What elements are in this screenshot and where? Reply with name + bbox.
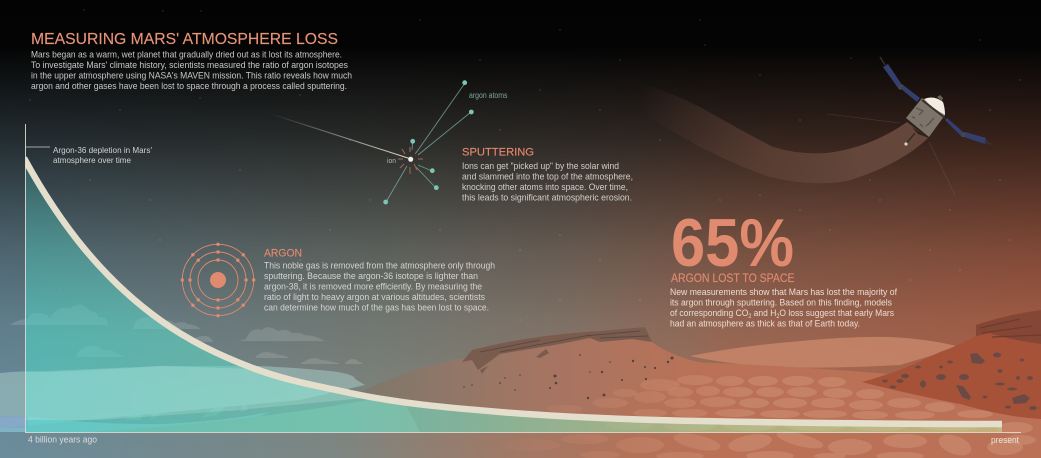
chart axes (26, 124, 1021, 432)
pale ice band inside chart area (25, 366, 365, 420)
cracked ground plates (460, 375, 1036, 458)
argon text: ratio of light to heavy argon at various altitudes, scientists (264, 291, 485, 302)
65% statistic: 65% (671, 205, 794, 281)
ion label: ion (387, 156, 396, 165)
x axis end label: present (991, 435, 1019, 445)
65% explanatory text: New measurements show that Mars has lost the majority of (670, 286, 897, 297)
argon text: argon-38, it is removed more efficiently. By measuring the (264, 280, 482, 292)
curve label: Argon-36 depletion in Mars' (53, 145, 152, 155)
sputtering diagram (268, 80, 474, 204)
sputtering text: knocking other atoms into space. Over time, (462, 181, 628, 192)
right hill (862, 310, 1041, 419)
65% explanatory text: had an atmosphere as thick as that of Earth today. (670, 318, 860, 328)
65% explanatory text: O loss suggest that early Mars (779, 307, 894, 318)
orbit swoosh (640, 83, 928, 183)
argon text: This noble gas is removed from the atmosphere only through (264, 260, 495, 270)
argon text (264, 260, 495, 312)
intro text: To investigate Mars' climate history, scientists measured the ratio of argon isotopes (31, 59, 348, 70)
curve label (25, 145, 152, 165)
icon: argon atom (181, 243, 255, 317)
65% explanatory text: 2 (776, 314, 780, 320)
foreground slope (90, 394, 420, 432)
argon depletion curve (24, 158, 1002, 424)
intro text (31, 48, 352, 91)
argon atoms label: argon atoms (469, 91, 508, 100)
central mesa (360, 327, 716, 418)
clouds (10, 305, 363, 364)
65% explanatory text: 2 (748, 314, 752, 320)
MAVEN spacecraft (827, 57, 994, 195)
intro text: in the upper atmosphere using NASA's MAVEN mission. This ratio reveals how much (31, 70, 352, 80)
argon text: sputtering. Because the argon-36 isotope is lighter than (264, 270, 478, 281)
sputtering text: Ions can get "picked up" by the solar wind (462, 160, 619, 171)
ground (0, 362, 1041, 458)
65% explanatory text (670, 286, 897, 328)
65% explanatory text: and H (751, 307, 776, 318)
curve label: atmosphere over time (53, 155, 131, 165)
65% explanatory text: of corresponding CO (670, 307, 757, 318)
sputtering heading: SPUTTERING (462, 146, 534, 158)
argon text: can determine how much of the gas has been lost to space. (264, 302, 489, 312)
x axis start label: 4 billion years ago (28, 434, 97, 444)
area under argon depletion curve (25, 160, 1002, 432)
far dune (690, 337, 960, 368)
sputtering text: and slammed into the top of the atmosphere, (462, 170, 633, 182)
intro text: Mars began as a warm, wet planet that gradually dried out as it lost its atmosphere. (31, 48, 342, 60)
title: MEASURING MARS' ATMOSPHERE LOSS (31, 31, 338, 48)
sputtering text (462, 160, 633, 202)
argon heading: ARGON (264, 248, 302, 260)
intro text: argon and other gases have been lost to space through a process called sputtering. (31, 80, 347, 91)
sputtering text: this leads to significant atmospheric erosion. (462, 192, 632, 202)
distant ice ridge (0, 366, 365, 432)
65% explanatory text: its argon through sputtering. Based on this finding, models (670, 296, 892, 308)
argon lost to space heading: ARGON LOST TO SPACE (671, 271, 794, 285)
